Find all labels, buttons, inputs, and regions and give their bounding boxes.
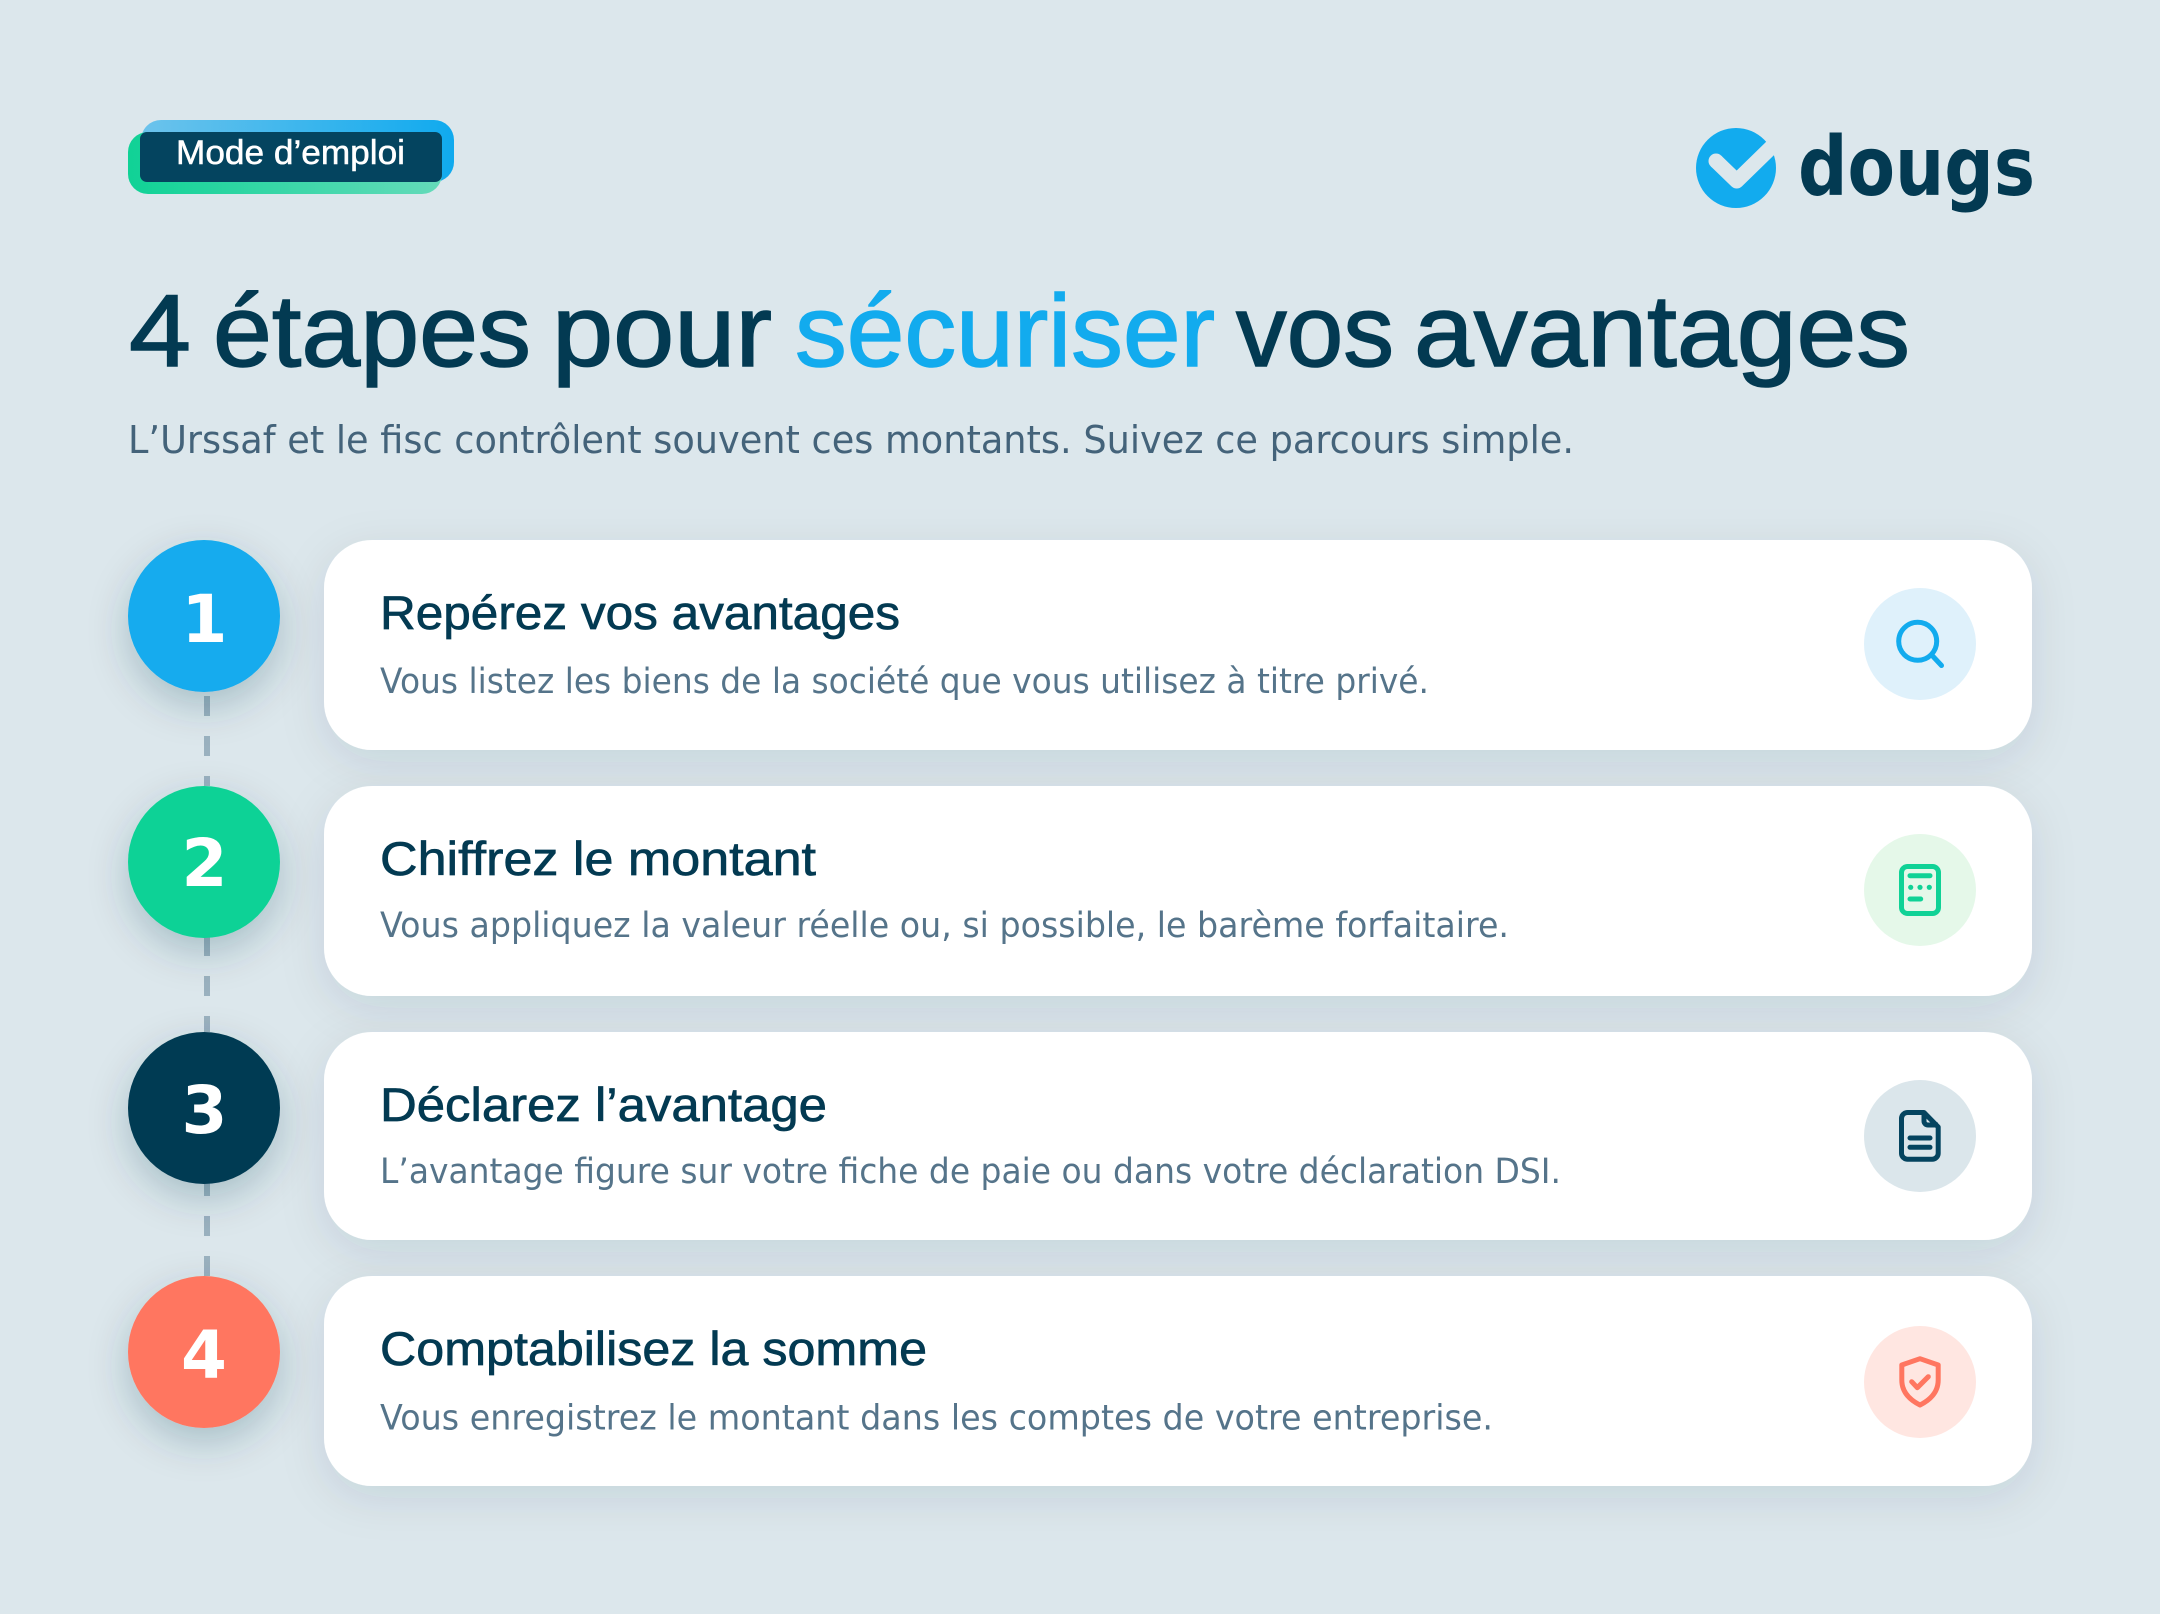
badge: Mode d'emploi: Mode d’emploi: [176, 134, 405, 172]
step 2 number: [128, 786, 280, 938]
title: avantages: [1414, 274, 1910, 388]
step 4 heading: Comptabilisez la somme: [380, 1322, 927, 1375]
step 3 heading: Déclarez l’avantage: [380, 1078, 827, 1131]
connector: steps 2 to 3: [204, 936, 210, 1032]
step 2 number: 2: [182, 825, 227, 902]
title: [129, 274, 1910, 388]
subtitle: L’Urssaf et le fisc contrôlent souvent ces montants. Suivez ce parcours simple.: [128, 418, 1574, 463]
logo: dougs: [1696, 120, 2035, 215]
step 3 description: L’avantage figure sur votre fiche de paie ou dans votre déclaration DSI.: [380, 1152, 1561, 1192]
step 2 description: Vous appliquez la valeur réelle ou, si possible, le barème forfaitaire.: [380, 906, 1509, 946]
step 2 heading: Chiffrez le montant: [380, 832, 816, 885]
step 4 number: 4: [181, 1317, 227, 1394]
title: pour: [552, 274, 772, 388]
icon: logo check mark: [1696, 128, 1788, 208]
title: sécuriser: [795, 274, 1215, 388]
panel: step 4 card: [324, 1276, 2032, 1486]
step 1 description: Vous listez les biens de la société que vous utilisez à titre privé.: [380, 662, 1429, 702]
title: 4: [129, 274, 191, 388]
step 4 number: [128, 1276, 280, 1428]
icon: magnifying glass: [1864, 588, 1976, 700]
badge: Mode d'emploi: [128, 120, 454, 194]
icon: document: [1864, 1080, 1976, 1192]
step 1 number: [128, 540, 280, 692]
connector: steps 3 to 4: [204, 1176, 210, 1276]
step 3 number: 3: [182, 1072, 227, 1149]
logo: dougs: dougs: [1798, 120, 2035, 215]
panel: step 1 card: [324, 540, 2032, 750]
step 3 number: [128, 1032, 280, 1184]
icon: calculator: [1864, 834, 1976, 946]
step 4 description: Vous enregistrez le montant dans les comptes de votre entreprise.: [380, 1398, 1493, 1438]
icon: shield: [1864, 1326, 1976, 1438]
title: vos: [1236, 274, 1394, 388]
step 1 heading: Repérez vos avantages: [380, 586, 900, 639]
step 1 number: 1: [182, 581, 227, 658]
panel: step 3 card: [324, 1032, 2032, 1240]
connector: steps 1 to 2: [204, 656, 210, 786]
title: étapes: [213, 274, 531, 388]
panel: step 2 card: [324, 786, 2032, 996]
